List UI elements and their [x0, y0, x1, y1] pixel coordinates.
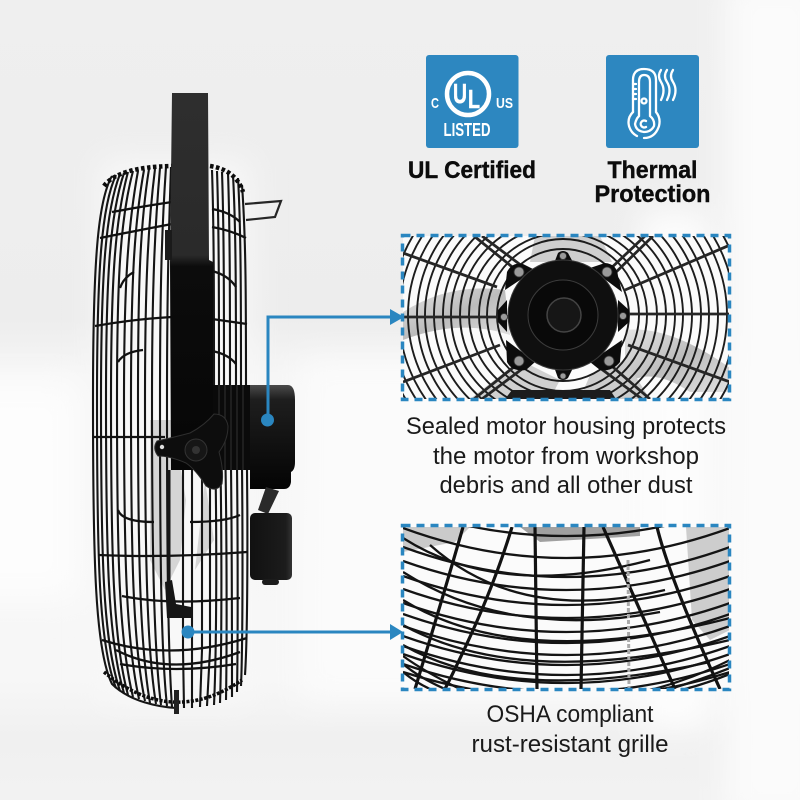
bottom pin — [174, 690, 179, 714]
mounting screws — [500, 252, 626, 379]
wire handle — [245, 201, 281, 220]
grille rings — [403, 236, 729, 399]
blades — [403, 288, 510, 340]
fan side view — [93, 93, 295, 714]
panel: grille close-up — [400, 524, 732, 692]
bracket clip — [165, 230, 172, 260]
motor stem — [258, 487, 279, 514]
latch rod — [165, 470, 191, 618]
concentric arcs — [403, 527, 729, 689]
text: grille description: rust-resistant grille — [472, 731, 668, 758]
dashed frame — [402, 526, 730, 690]
text: motor description: debris and all other dust — [440, 472, 693, 499]
heading: Thermal Protection: Protection — [594, 181, 710, 208]
callout arrow: grille — [182, 624, 403, 640]
text: motor description: the motor from workshop — [433, 443, 699, 470]
panel: motor close-up — [400, 234, 732, 402]
radial wires — [415, 527, 720, 689]
text: motor description: Sealed motor housing protects — [406, 413, 726, 440]
motor ears — [498, 251, 629, 380]
motor mount — [213, 385, 251, 470]
top rim — [104, 166, 243, 192]
base — [505, 390, 616, 399]
icon: UL listed: US — [496, 95, 513, 112]
icon: UL listed: LISTED — [444, 120, 490, 140]
icon: UL listed: L — [468, 84, 480, 114]
dashed frame — [402, 236, 730, 400]
mount wires — [219, 385, 243, 470]
text: grille description: OSHA compliant — [486, 701, 654, 728]
grille spokes — [403, 236, 730, 399]
grille horizontal rings — [93, 202, 248, 669]
heading: Thermal Protection: Thermal — [608, 157, 698, 184]
mounting bracket — [170, 93, 213, 470]
grille vertical wires — [93, 167, 247, 708]
bottom rim — [104, 672, 242, 702]
callout arrow: motor — [261, 309, 404, 426]
motor housing — [250, 385, 295, 489]
icon: UL listed — [426, 55, 518, 148]
fan blade behind grille — [150, 420, 186, 590]
icon: thermometer — [606, 55, 699, 148]
heading: UL Certified: UL Certified — [408, 157, 536, 184]
background shapes — [403, 527, 470, 552]
capacitor box — [250, 513, 292, 580]
adjustment knob — [155, 414, 228, 489]
icon: UL listed: C — [431, 95, 439, 112]
icon: UL listed: U — [453, 78, 467, 109]
motor face — [508, 260, 618, 370]
